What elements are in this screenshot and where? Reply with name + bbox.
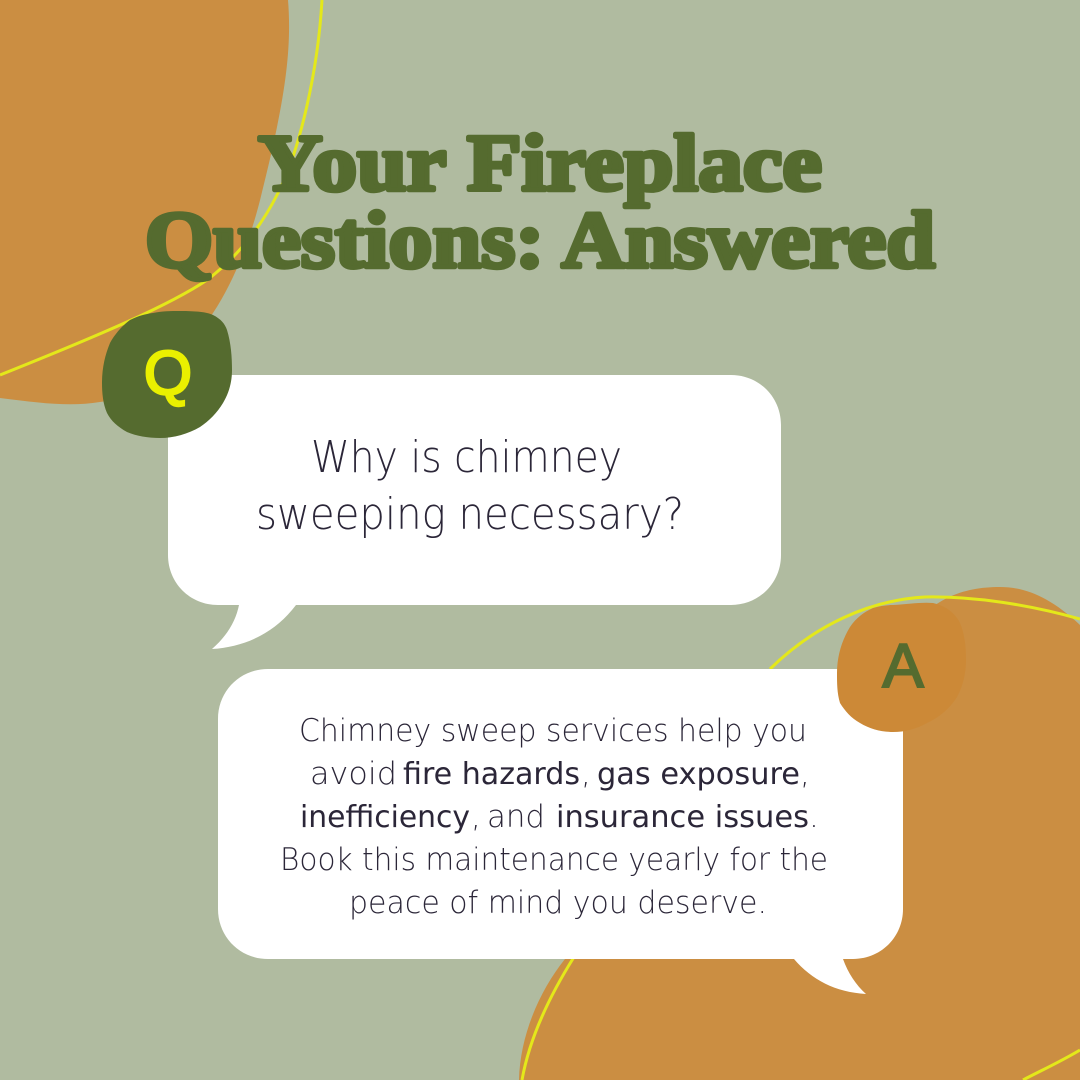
answer text: Chimney sweep services help you (299, 713, 807, 749)
answer text: , (471, 799, 481, 835)
line: bottom-right yellow curve (1023, 1050, 1080, 1080)
question text: sweeping necessary? (256, 489, 684, 540)
answer text: inefficiency (300, 800, 470, 835)
answer text: insurance issues (556, 800, 809, 835)
badge: Q: Q (144, 339, 192, 408)
answer text: avoid (310, 756, 397, 792)
answer text: , (581, 756, 591, 792)
answer text: gas exposure (597, 757, 800, 792)
title (145, 120, 935, 285)
line: bottom-left yellow curve (522, 957, 574, 1080)
answer text: fire hazards (403, 757, 580, 792)
answer text: , (800, 756, 810, 792)
panel: answer speech bubble (218, 669, 903, 994)
question text (256, 432, 684, 540)
badge: Q (102, 311, 232, 438)
answer text: Book this maintenance yearly for the (280, 842, 828, 878)
answer text: and (487, 799, 545, 835)
blob: top-left orange (0, 0, 289, 404)
title: Questions: Answered (145, 197, 935, 285)
line: top-left yellow curve (0, 0, 322, 375)
answer text (280, 713, 828, 921)
line: right yellow curve (770, 597, 1080, 669)
badge: A: A (882, 632, 924, 701)
title: Your Fireplace (258, 120, 822, 208)
badge: A (837, 603, 966, 732)
answer text: peace of mind you deserve. (349, 885, 767, 921)
answer text: . (809, 799, 819, 835)
panel: question speech bubble (168, 375, 781, 649)
blob: bottom-right orange (519, 587, 1080, 1080)
question text: Why is chimney (311, 432, 622, 483)
